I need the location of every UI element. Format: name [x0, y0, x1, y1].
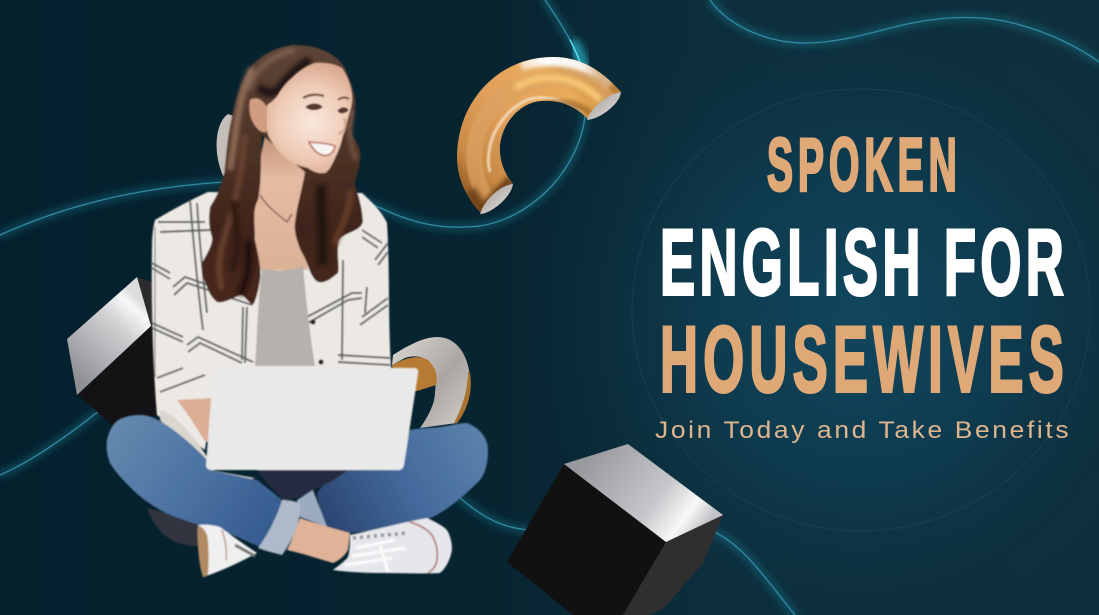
dark lower leg shadow — [147, 508, 230, 546]
laptop — [206, 366, 418, 470]
grey tee — [255, 266, 315, 366]
hair — [202, 45, 363, 305]
dark jeans under laptop — [257, 470, 348, 500]
right sneaker — [333, 518, 452, 573]
gold 3D torus — [457, 57, 621, 214]
large cube — [507, 444, 723, 615]
inner cuff — [297, 490, 327, 527]
small grey ring behind head — [217, 114, 240, 176]
nose shadow — [338, 118, 345, 134]
title: ENGLISH FOR: ENGLISH FOR — [660, 211, 1064, 315]
torus end caps — [480, 92, 621, 214]
woman sitting with laptop — [107, 45, 488, 577]
left jeans leg — [107, 415, 282, 547]
shirt hem at waist — [160, 410, 255, 482]
bare ankle — [287, 518, 350, 563]
subtitle: Join Today and Take Benefits — [655, 417, 1069, 444]
smile — [309, 142, 335, 156]
left sneaker — [198, 525, 257, 577]
forearm — [177, 398, 212, 445]
right jeans leg — [317, 423, 488, 533]
shirt buttons — [310, 319, 324, 365]
hair strands — [219, 50, 356, 295]
title: HOUSEWIVES: HOUSEWIVES — [660, 308, 1064, 412]
ear — [249, 98, 267, 132]
necklace — [260, 195, 292, 222]
grey and gold ring behind laptop — [392, 337, 471, 428]
eyes and brows — [303, 95, 349, 113]
neck and chest — [252, 130, 312, 270]
shirt plaid stripes — [152, 200, 390, 392]
faint circle behind title — [632, 89, 1090, 531]
face — [266, 63, 352, 173]
rolled jeans cuff — [258, 500, 300, 555]
title: SPOKEN: SPOKEN — [767, 123, 957, 207]
shirt — [152, 192, 391, 450]
left cube — [67, 277, 160, 426]
